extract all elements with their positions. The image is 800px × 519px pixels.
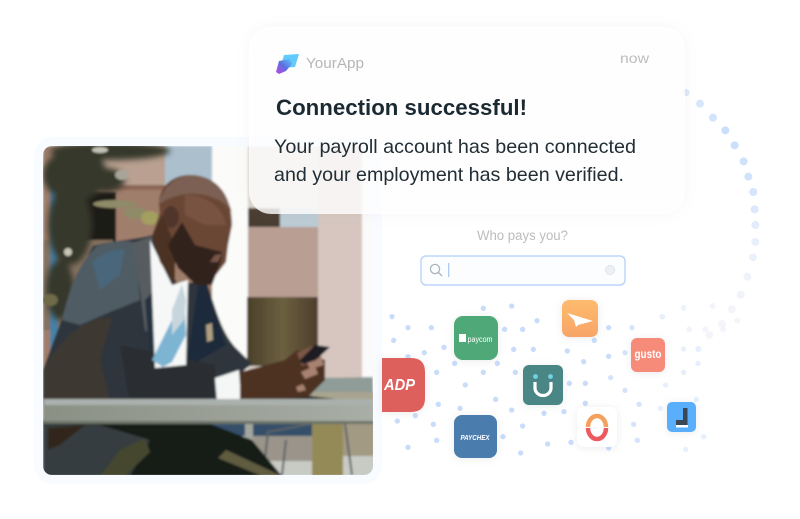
trousers <box>43 420 282 476</box>
connection illustration <box>43 54 760 475</box>
table <box>44 399 374 424</box>
app name: YourApp <box>306 55 364 72</box>
photo frame <box>34 137 382 484</box>
floor and furniture under table <box>205 424 375 476</box>
dotted arc <box>659 89 759 339</box>
icon: YourApp logo <box>276 54 299 74</box>
search box <box>421 256 625 285</box>
icon: search <box>430 264 442 276</box>
head and beard <box>152 175 232 285</box>
logo: orange paper arrow <box>562 300 598 337</box>
notification card <box>249 27 685 214</box>
jacket <box>43 235 252 408</box>
icon: loading spinner <box>606 266 614 274</box>
message text: and your employment has been verified. <box>274 164 624 186</box>
photo: man using phone at table <box>42 142 375 476</box>
logo: Paychex: PAYCHEX <box>460 433 490 442</box>
label: who pays you: Who pays you? <box>477 228 568 243</box>
logo: J <box>667 402 696 432</box>
heading: Connection successful! <box>276 95 527 120</box>
logo: Gusto: gusto <box>634 347 662 361</box>
tree <box>43 146 174 350</box>
dotted network background <box>389 303 708 456</box>
shirt and tie <box>150 240 241 402</box>
logo: Paycom <box>454 316 498 360</box>
building background <box>43 146 373 421</box>
hands and phone <box>240 345 345 402</box>
timestamp: now <box>620 50 650 66</box>
logo: ADP <box>382 358 425 412</box>
logo: Paycom: paycom <box>468 335 493 344</box>
logo: ADP: ADP <box>383 377 415 394</box>
logo: Paychex <box>454 415 497 458</box>
logo: red and orange ring <box>577 407 617 447</box>
logo: Gusto <box>631 338 665 372</box>
message text: Your payroll account has been connected <box>274 136 636 158</box>
logo: teal smile <box>523 365 563 405</box>
